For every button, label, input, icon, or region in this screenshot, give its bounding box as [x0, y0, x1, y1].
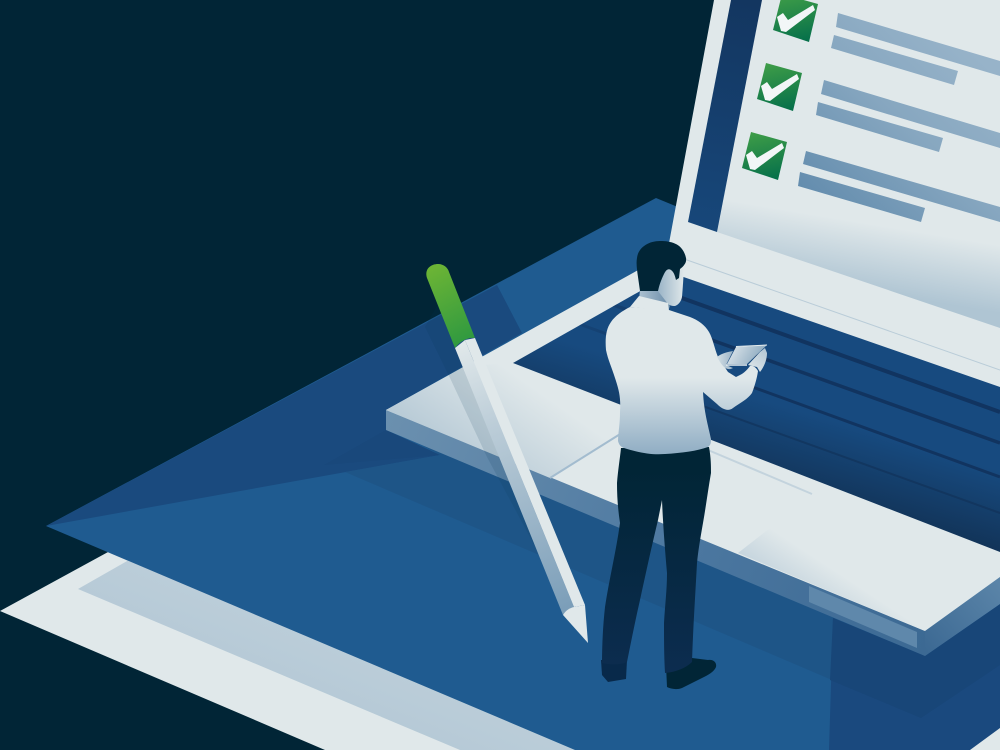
- port slot: [809, 586, 917, 648]
- tablet: [726, 345, 767, 365]
- sheet shaded strip: [78, 548, 700, 750]
- left hand: [717, 351, 733, 369]
- base top surface and screen bezel: [386, 0, 1000, 631]
- floor dark wedge: [46, 285, 522, 526]
- sheet white margin: [0, 540, 700, 750]
- trousers: [602, 447, 711, 673]
- laptop: [386, 0, 1000, 656]
- checkbox 3: [742, 132, 787, 180]
- face: [658, 262, 684, 306]
- sheet corner bottom right: [970, 728, 1000, 750]
- right hand: [748, 348, 767, 372]
- row 1: [681, 296, 1000, 414]
- laptop dark shadow block: [829, 604, 1000, 750]
- right shoe: [666, 658, 716, 689]
- paper sheet under the floor: [0, 540, 700, 750]
- laptop base front edge: [386, 410, 925, 656]
- row 4: [700, 405, 1000, 513]
- laptop cast shadow: [345, 425, 1000, 718]
- row 3 bar 1: [803, 151, 1000, 222]
- floor main: [46, 198, 1000, 750]
- tablet screen: [727, 345, 767, 364]
- laptop base right edge: [925, 577, 1000, 656]
- neck: [639, 290, 670, 312]
- pencil shaded side: [455, 340, 574, 615]
- row 3 bar 2: [798, 172, 925, 222]
- keyboard panel: [513, 273, 1000, 552]
- tablet top edge: [736, 345, 767, 346]
- row 1 bar 1: [836, 13, 1000, 76]
- surface shading: [738, 528, 925, 631]
- row 3: [560, 317, 1000, 477]
- pencil light side: [465, 338, 585, 607]
- pencil tip: [563, 605, 588, 643]
- screen sidebar: [688, 0, 762, 232]
- trackpad back line: [708, 450, 812, 494]
- keyboard rows: [560, 283, 1000, 513]
- keyboard area: [513, 273, 1000, 552]
- row 2: [613, 304, 1000, 444]
- row 1 bar 2: [831, 35, 958, 85]
- shirt: [606, 307, 758, 454]
- pencil: [425, 264, 588, 643]
- shadow tip on wedge: [324, 430, 440, 465]
- trackpad left line: [550, 431, 625, 478]
- trackpad lines: [550, 431, 812, 494]
- shadow block upper shade: [830, 604, 1000, 718]
- pencil cast shadow: [425, 300, 565, 615]
- blue floor plane: [46, 198, 1000, 750]
- person: [601, 241, 767, 689]
- checkbox 2: [757, 63, 802, 111]
- hair: [637, 241, 686, 291]
- palm rest shading: [386, 363, 640, 478]
- left shoe: [601, 660, 627, 682]
- row 2 bar 1: [821, 80, 1000, 148]
- screen hinge line: [687, 260, 1000, 370]
- tablet near edge: [726, 364, 747, 366]
- checklist: [742, 0, 1000, 222]
- shirt collar: [630, 296, 669, 311]
- checklist text bars: [798, 13, 1000, 222]
- screen content: [717, 0, 1000, 328]
- pencil cap: [426, 264, 475, 348]
- row 2 bar 2: [816, 102, 943, 152]
- checkbox 1: [773, 0, 818, 42]
